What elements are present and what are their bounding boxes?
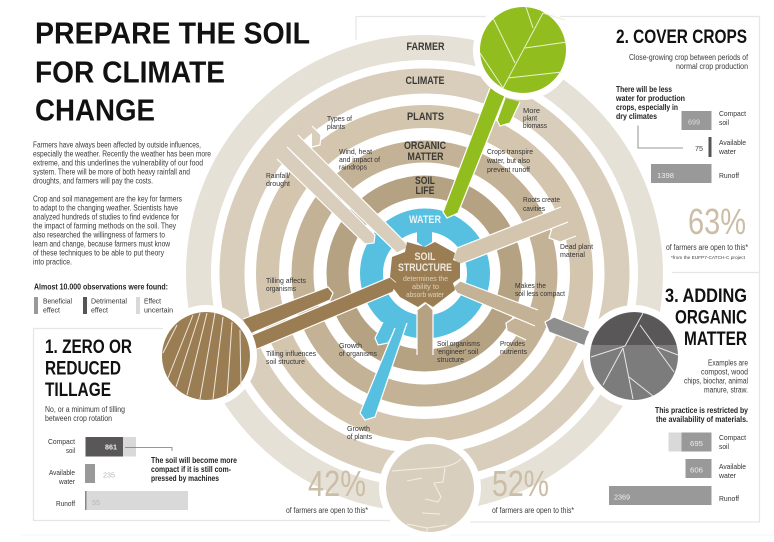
legend: Almost 10.000 observations were found: — [34, 282, 168, 292]
panel: adding organic matter: This practice is restricted by — [655, 406, 748, 415]
panel: zero or reduced tillage: water — [58, 477, 75, 486]
arrow labels: plants — [327, 122, 345, 131]
legend: Detrimental — [91, 296, 127, 306]
panel: adding organic matter: soil — [719, 442, 729, 451]
panel: adding organic matter: 606 — [690, 466, 703, 474]
icon: leaf circle — [473, 0, 573, 100]
panel: adding organic matter: water — [718, 471, 736, 480]
panel: adding organic matter: 3. ADDING — [665, 285, 747, 307]
arrow: water into soil — [417, 225, 432, 247]
panel: adding organic matter — [609, 285, 748, 505]
panel: adding organic matter: the availability of materials. — [656, 415, 748, 424]
arrow labels: drought — [266, 179, 291, 188]
arrow labels: Soil organisms — [437, 339, 480, 348]
panel: cover crops: Available — [719, 138, 746, 147]
arrows into soil structure — [243, 88, 592, 420]
panel: zero or reduced tillage: Available — [49, 468, 75, 477]
arrow labels — [266, 106, 594, 441]
arrow: provides nutrients — [506, 318, 530, 340]
ring labels — [404, 41, 446, 226]
panel: zero or reduced tillage: soil — [66, 446, 75, 455]
panel: zero or reduced tillage: TILLAGE — [45, 380, 111, 401]
title: CHANGE — [35, 92, 155, 128]
panel: zero or reduced tillage: REDUCED — [45, 358, 121, 380]
ring labels: FARMER — [406, 41, 445, 53]
panel: adding organic matter: Examples are — [708, 358, 748, 368]
panel: cover crops — [615, 26, 749, 260]
icon: organic matter circle — [583, 305, 685, 407]
intro text: to adapt to the changing weather. Scientists have — [33, 204, 178, 212]
legend: Effect — [144, 296, 162, 306]
intro text: the impact of farming methods on the soil. They — [33, 222, 176, 230]
panel: cover crops: dry climates — [616, 112, 657, 121]
intro text: Farmers have always been affected by outside influences, — [33, 140, 201, 150]
concentric rings diagram — [198, 48, 650, 500]
panel: adding organic matter: 695 — [690, 439, 703, 448]
title: FOR CLIMATE — [35, 54, 225, 90]
panel: zero or reduced tillage — [45, 337, 237, 510]
panel: cover crops: crops, especially in — [616, 103, 678, 112]
panel: adding organic matter: manure, straw. — [704, 386, 748, 394]
ring labels: WATER — [409, 214, 441, 226]
legend: Beneficial — [43, 296, 72, 306]
arrow labels: More — [523, 106, 540, 115]
arrow labels: Roots create — [523, 195, 560, 204]
arrow: growth of organisms — [375, 322, 397, 345]
arrow: tilling affects organisms — [243, 287, 333, 334]
icon: tillage circle — [155, 305, 257, 407]
arrow: makes the soil less compact — [453, 281, 538, 326]
panel: cover crops: Close-growing crop between periods of — [629, 53, 749, 62]
panel: zero or reduced tillage: 861 — [105, 442, 117, 452]
arrow labels: Crops transpire — [487, 147, 533, 156]
panel: cover crops: water for production — [615, 94, 685, 103]
arrow labels: Tilling affects — [266, 276, 306, 285]
arrow: more plant biomass — [497, 98, 520, 126]
ring: climate — [232, 81, 617, 466]
panel: adding organic matter: ORGANIC — [675, 306, 747, 328]
ring labels: SOIL — [415, 175, 435, 187]
soil structure core: SOIL — [414, 251, 436, 263]
callout: 52 percent: 52% — [492, 463, 549, 504]
callout: 42 percent: 42% — [308, 463, 366, 504]
panel: zero or reduced tillage: 235 — [103, 470, 115, 480]
intro text: system. There will be more of both heavy rainfall and — [33, 168, 190, 176]
ring: organic matter — [302, 152, 546, 396]
callout: 52 percent — [492, 463, 574, 515]
panel: zero or reduced tillage: between crop rotation — [45, 414, 112, 423]
intro text: of these techniques to be able to put theory — [33, 248, 164, 258]
callout: 42 percent: of farmers are open to this* — [286, 506, 368, 515]
panel: cover crops: 699 — [688, 118, 700, 126]
arrow labels: Wind, heat — [339, 147, 373, 156]
arrow labels: structure — [437, 355, 464, 364]
callout: 52 percent: of farmers are open to this* — [492, 506, 574, 515]
legend: effect — [91, 306, 109, 314]
arrow labels: cavities — [523, 204, 545, 213]
panel: cover crops: Runoff — [719, 171, 740, 180]
arrow labels: Tilling influences — [266, 349, 316, 358]
panel: adding organic matter: chips, biochar, animal — [684, 376, 748, 386]
arrow: organic matter input — [545, 317, 592, 347]
arrow labels: Types of — [327, 114, 353, 123]
panel: zero or reduced tillage: 1. ZERO OR — [45, 337, 132, 358]
panel: cover crops: of farmers are open to this* — [666, 243, 748, 252]
arrow labels: soil less compact — [515, 289, 566, 298]
intro text: learn and change, because farmers must know — [33, 240, 170, 248]
panel: zero or reduced tillage: compact if it is still com- — [151, 465, 231, 474]
intro text: also researched the willingness of farmers to — [33, 230, 165, 240]
arrow: soil organisms engineer soil structure — [417, 303, 433, 355]
panel: cover crops: soil — [719, 118, 729, 127]
arrow labels: Dead plant — [560, 242, 594, 251]
arrow: rainfall and drought — [277, 147, 375, 244]
title — [35, 16, 310, 128]
soil structure core: STRUCTURE — [398, 262, 452, 274]
arrow labels: soil structure — [266, 357, 305, 366]
panel: adding organic matter: 2369 — [614, 492, 630, 502]
callout: 42 percent — [286, 463, 368, 515]
arrow labels: Growth — [347, 424, 370, 433]
arrow labels: organisms — [266, 284, 296, 293]
arrow: roots create cavities — [453, 207, 568, 265]
arrow: wind, heat and impact of raindrops — [287, 135, 407, 253]
soil structure core: determines the — [403, 274, 448, 283]
panel: cover crops: water — [718, 147, 736, 156]
arrow labels: material — [560, 250, 585, 259]
panel: zero or reduced tillage: pressed by machines — [151, 474, 219, 483]
arrow: tilling influences soil structure — [252, 277, 397, 349]
arrow: crops transpire water — [443, 88, 505, 218]
arrow labels: biomass — [523, 121, 547, 130]
panel: cover crops: There will be less — [616, 85, 672, 94]
soil structure core: ability to — [412, 282, 439, 291]
soil structure core: absorb water — [406, 290, 444, 299]
intro text: extreme, and this underlines the vulnerability of our food — [33, 158, 203, 168]
title: PREPARE THE SOIL — [35, 16, 310, 50]
intro text — [33, 140, 211, 266]
panel: zero or reduced tillage: Runoff — [56, 499, 76, 508]
intro text: analyzed hundreds of studies to find evidence for — [33, 212, 179, 222]
ring labels: MATTER — [408, 151, 444, 163]
legend — [34, 282, 173, 314]
panel: adding organic matter: Runoff — [719, 494, 740, 503]
ring labels: CLIMATE — [406, 75, 444, 87]
intro text: especially the weather. Recently the weather has been more — [33, 150, 211, 158]
panel: cover crops: 63% — [688, 201, 746, 242]
panel: cover crops: normal crop production — [676, 62, 748, 71]
legend: effect — [43, 306, 61, 314]
arrow labels: Growth — [339, 341, 362, 350]
arrow: types of plants — [312, 126, 321, 147]
arrow labels: and impact of — [339, 155, 381, 164]
panel: zero or reduced tillage: 55 — [92, 498, 100, 507]
panel: zero or reduced tillage: Compact — [48, 437, 76, 446]
intro text: Crop and soil management are the key for farmers — [33, 194, 182, 204]
arrow labels: prevent runoff — [487, 165, 531, 174]
arrow labels: water, but also — [486, 156, 530, 165]
ring: water — [372, 220, 478, 327]
arrow labels: 'engineer' soil — [437, 347, 478, 356]
intro text: into practice. — [33, 258, 72, 266]
panel: cover crops: Compact — [719, 109, 747, 118]
panel: cover crops: 75 — [695, 144, 703, 153]
arrow labels: Rainfall/ — [266, 171, 291, 180]
panel: zero or reduced tillage: The soil will become more — [151, 456, 237, 465]
arrow labels: of plants — [347, 432, 372, 441]
ring labels: LIFE — [416, 185, 434, 197]
ring labels: ORGANIC — [404, 140, 446, 152]
panel: adding organic matter: Available — [719, 462, 746, 471]
panel: cover crops: *from the EUFP7-CATCH-C project — [671, 255, 746, 260]
panel: adding organic matter: compost, wood — [701, 368, 748, 376]
icon: farmer face circle — [379, 437, 481, 539]
panel: adding organic matter: Compact — [719, 433, 747, 442]
panel: adding organic matter: MATTER — [684, 328, 747, 350]
ring labels: PLANTS — [407, 111, 444, 123]
panel: cover crops: 1398 — [657, 171, 674, 180]
panel: zero or reduced tillage: No, or a minimum of tilling — [45, 405, 125, 414]
arrow: growth of plants — [360, 323, 407, 420]
soil structure core — [390, 242, 460, 307]
arrow labels: raindrops — [339, 162, 367, 172]
ring: plants — [268, 116, 582, 430]
legend: uncertain — [144, 306, 173, 314]
arrow: dead plant material — [549, 222, 576, 242]
ring: soil life — [338, 186, 512, 360]
arrow labels: of organisms — [339, 349, 377, 358]
intro text: droughts, and farmers will pay the costs. — [33, 176, 153, 186]
arrow labels: plant — [523, 114, 538, 122]
arrow labels: nutrients — [500, 347, 527, 356]
arrow labels: Makes the — [515, 281, 546, 290]
arrow labels: Provides — [500, 339, 525, 348]
ring: farmer — [198, 48, 650, 500]
